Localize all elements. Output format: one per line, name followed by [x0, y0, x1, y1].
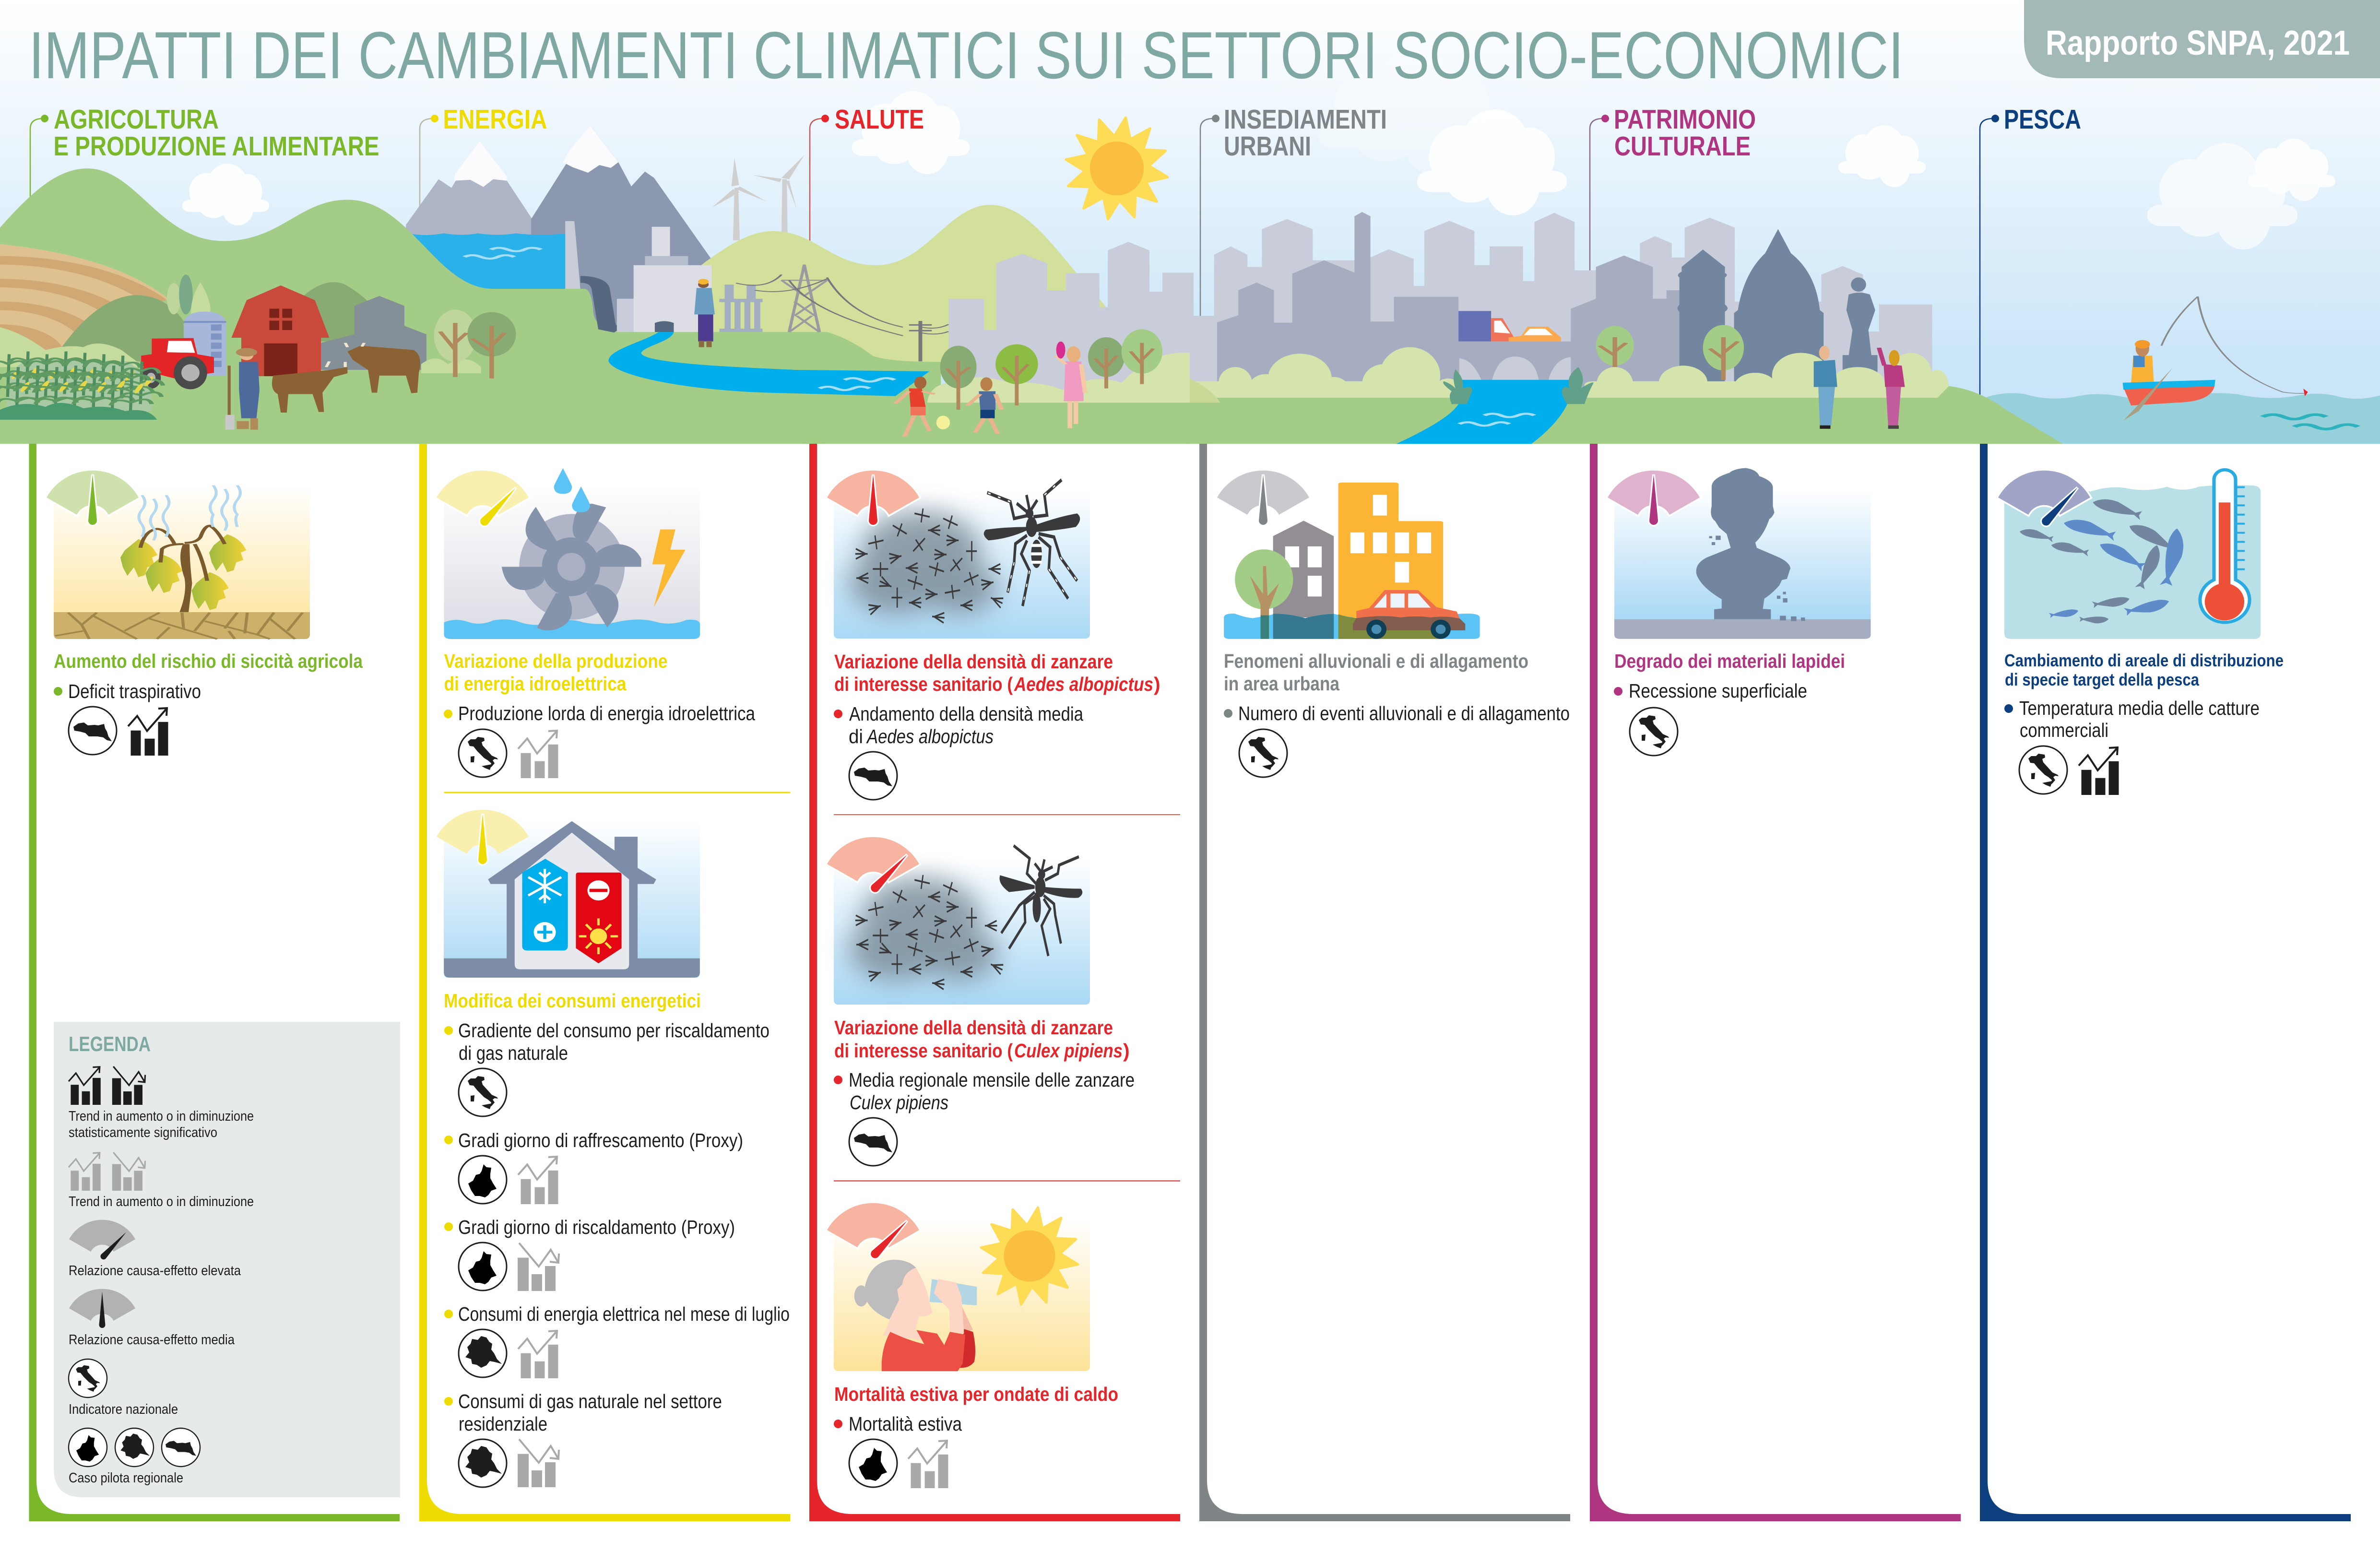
indicator heading — [834, 1017, 1130, 1062]
woman with ball — [1056, 342, 1085, 428]
indicator heading — [834, 651, 1160, 695]
illustration: Culex mosquito swarm — [834, 846, 1090, 1005]
right half of landscape — [1190, 212, 2380, 444]
river in city — [1396, 380, 1573, 444]
indicator heading: Variazione della produzione — [444, 650, 668, 672]
column frame — [1980, 444, 2351, 1521]
indicator heading: Fenomeni alluvionali e di allagamento — [1224, 650, 1528, 672]
cypress trees — [167, 274, 211, 316]
pale green hills — [702, 205, 1115, 370]
city skyline light — [1190, 213, 1932, 398]
wind turbines — [712, 155, 804, 240]
indicator: densita Aedes: di — [849, 725, 863, 747]
indicator: recessione superficiale — [1614, 680, 1807, 756]
legend: medium relation gauge: Relazione causa-effetto media — [69, 1332, 235, 1348]
worker — [694, 279, 715, 347]
gauge: medium relation — [827, 471, 919, 525]
column frame — [419, 444, 790, 1521]
column frame — [1199, 444, 1570, 1521]
indicator: temperatura catture: Temperatura media delle catture — [2019, 697, 2260, 719]
indicator: consumi gas — [444, 1390, 722, 1487]
legend: medium relation gauge — [69, 1289, 235, 1348]
indicator: consumi elettrici: Consumi di energia elettrica nel mese di luglio — [458, 1303, 790, 1325]
indicator heading: di specie target della pesca — [2005, 670, 2200, 689]
man and woman — [1814, 346, 1905, 429]
trees near monuments — [1596, 325, 1744, 380]
heading: agricoltura — [54, 104, 379, 162]
indicator: gradiente consumo: di gas naturale — [459, 1042, 568, 1064]
indicator: gradi giorno riscaldamento: Gradi giorno di riscaldamento (Proxy) — [458, 1216, 735, 1238]
illustration: eroding stone bust — [1614, 468, 1871, 639]
indicator: gradi giorno raffrescamento — [444, 1129, 743, 1204]
legend title: LEGENDA — [69, 1032, 151, 1056]
indicator heading: Modifica dei consumi energetici — [444, 990, 701, 1012]
indicator: mortalita estiva — [834, 1413, 962, 1488]
city skyline light — [948, 242, 1190, 404]
legend: national indicator: Indicatore nazionale — [69, 1402, 178, 1417]
illustration: hydro turbine — [444, 468, 700, 639]
indicator heading: ) — [1123, 1040, 1130, 1062]
bushes — [1190, 347, 1949, 404]
children playing — [895, 377, 1002, 437]
indicator heading: Variazione della densità di zanzare — [834, 651, 1113, 673]
fisherman in boat — [2123, 296, 2308, 421]
indicator: recessione superficiale: Recessione superficiale — [1629, 680, 1807, 702]
illustration: elderly woman drinking in the heat — [834, 1208, 1090, 1371]
indicator: produzione lorda: Produzione lorda di energia idroelettrica — [458, 702, 755, 724]
indicator: gradiente consumo — [444, 1019, 770, 1116]
lake — [410, 233, 569, 290]
indicator: media Culex: Culex pipiens — [850, 1091, 948, 1113]
transformer and pylon — [719, 265, 948, 361]
gauge: medium relation — [47, 471, 139, 525]
cows — [272, 343, 420, 413]
indicator heading: in area urbana — [1224, 673, 1340, 695]
panel: agricoltura — [29, 444, 400, 1521]
heading: pesca: PESCA — [2004, 104, 2081, 135]
indicator: produzione lorda — [444, 702, 755, 778]
truck and car — [1458, 311, 1561, 342]
heading: patrimonio culturale — [1614, 104, 1756, 162]
indicator: densita Aedes — [834, 703, 1083, 800]
illustration: house heating and cooling — [444, 820, 700, 978]
trees near park — [940, 329, 1162, 410]
farmer — [225, 348, 260, 430]
indicator: mortalita estiva: Mortalità estiva — [849, 1413, 962, 1435]
silo — [184, 311, 226, 376]
gauge: medium relation — [1608, 471, 1700, 525]
legend: trend — [69, 1152, 254, 1209]
illustration: fish and thermometer — [2004, 470, 2261, 639]
mountains with snow — [406, 126, 713, 333]
indicator: densita Aedes: Aedes albopictus — [865, 725, 994, 747]
indicator: consumi elettrici — [444, 1303, 790, 1378]
shrub at left edge — [1190, 379, 1220, 403]
power station — [617, 227, 712, 332]
indicator: gradi giorno raffrescamento: Gradi giorno di raffrescamento (Proxy) — [458, 1129, 743, 1151]
city skyline mid tone — [1217, 212, 1683, 392]
panel: pesca — [1980, 444, 2351, 1521]
indicator: gradi giorno riscaldamento — [444, 1216, 735, 1291]
indicator: media Culex — [834, 1069, 1135, 1166]
indicator: temperatura catture: commerciali — [2020, 719, 2108, 741]
indicator: consumi gas: residenziale — [459, 1413, 547, 1435]
bridge arches — [1459, 356, 1571, 381]
field stripes — [0, 244, 167, 350]
indicator heading: di interesse sanitario ( — [834, 673, 1013, 695]
indicator heading — [2004, 651, 2284, 689]
indicator: deficit traspirativo — [54, 680, 201, 756]
legend: significant trend: statisticamente significativo — [69, 1125, 217, 1140]
left half of landscape — [0, 126, 1190, 451]
gauge: medium relation — [437, 810, 529, 864]
heading: insediamenti urbani: URBANI — [1224, 131, 1311, 162]
indicator heading: di interesse sanitario ( — [834, 1040, 1013, 1062]
meadow — [1190, 386, 2063, 444]
heading: salute: SALUTE — [835, 104, 924, 135]
leader lines from sector headings — [30, 115, 1999, 413]
heading: patrimonio culturale: CULTURALE — [1614, 131, 1751, 162]
heading: insediamenti urbani: INSEDIAMENTI — [1224, 104, 1387, 135]
cathedral and statue — [1678, 229, 1878, 392]
indicator: gradiente consumo: Gradiente del consumo per riscaldamento — [458, 1019, 770, 1042]
illustration: Aedes mosquito swarm — [834, 480, 1090, 639]
column frame — [809, 444, 1180, 1521]
tractor — [141, 338, 214, 389]
shrubs behind park — [927, 353, 1190, 403]
legend: high relation gauge — [69, 1220, 241, 1279]
column frame — [1590, 444, 1961, 1521]
legend: significant trend — [69, 1066, 254, 1140]
trees near farm — [421, 309, 516, 379]
indicator heading: Variazione della densità di zanzare — [834, 1017, 1113, 1039]
indicator heading: Cambiamento di areale di distribuzione — [2004, 651, 2284, 670]
panel: patrimonio culturale — [1590, 444, 1961, 1521]
sun in the sky — [1066, 118, 1168, 219]
indicator: consumi gas: Consumi di gas naturale nel settore — [458, 1390, 722, 1412]
gauge: high relation — [827, 837, 919, 894]
grey barn building — [321, 296, 426, 370]
indicator heading: Aumento del rischio di siccità agricola — [54, 650, 363, 672]
legend: significant trend: Trend in aumento o in diminuzione — [69, 1109, 254, 1124]
sea — [1987, 393, 2380, 444]
scene: landscape banner — [0, 57, 2380, 444]
indicator: temperatura catture — [2004, 697, 2260, 795]
corn field — [0, 327, 163, 420]
report badge — [2024, 0, 2380, 78]
heading: agricoltura: E PRODUZIONE ALIMENTARE — [54, 131, 379, 162]
heading: energia: ENERGIA — [443, 104, 547, 135]
gauge: high relation — [437, 471, 529, 527]
panel: salute — [809, 444, 1180, 1521]
indicator: eventi alluvionali: Numero di eventi alluvionali e di allagamento — [1238, 702, 1570, 724]
indicator heading: Aedes albopictus — [1014, 673, 1153, 695]
illustration: flooded buildings and car — [1224, 483, 1480, 639]
indicator heading: ) — [1154, 673, 1160, 695]
river — [608, 332, 929, 396]
red barn — [231, 285, 329, 376]
heading: agricoltura: AGRICOLTURA — [54, 104, 219, 135]
indicator: densita Aedes: Andamento della densità media — [849, 703, 1083, 725]
legend: trend: Trend in aumento o in diminuzione — [69, 1194, 254, 1209]
title: IMPATTI DEI CAMBIAMENTI CLIMATICI SUI SETTORI SOCIO-ECONOMICI — [29, 18, 1904, 93]
gauge: high relation — [1998, 471, 2090, 527]
rear hills — [61, 282, 372, 361]
legend: high relation gauge: Relazione causa-effetto elevata — [69, 1263, 241, 1279]
illustration: withered vine on cracked soil — [54, 485, 310, 639]
panel: insediamenti urbani — [1199, 444, 1570, 1521]
indicator heading — [444, 650, 668, 695]
indicator: media Culex: Media regionale mensile delle zanzare — [849, 1069, 1135, 1091]
reeds — [1443, 367, 1594, 404]
column frame — [29, 444, 400, 1521]
panel: energia — [419, 444, 791, 1521]
clouds — [182, 51, 2335, 249]
indicator heading — [1224, 650, 1528, 695]
heading: patrimonio culturale: PATRIMONIO — [1614, 104, 1756, 135]
indicator heading: Culex pipiens — [1014, 1040, 1123, 1062]
indicator heading: Degrado dei materiali lapidei — [1614, 650, 1845, 672]
legend: regional pilot case — [69, 1428, 200, 1486]
heading: insediamenti urbani — [1224, 104, 1387, 162]
indicator heading: Mortalità estiva per ondate di caldo — [834, 1383, 1118, 1405]
legend — [54, 1022, 400, 1497]
indicator heading: di energia idroelettrica — [444, 673, 627, 695]
legend: regional pilot case: Caso pilota regionale — [69, 1470, 183, 1486]
gauge: medium relation — [1217, 471, 1309, 525]
dam — [565, 221, 580, 290]
pipe — [580, 279, 618, 330]
indicator: deficit traspirativo: Deficit traspirativo — [68, 680, 201, 702]
gauge: high relation — [827, 1203, 919, 1260]
indicator: eventi alluvionali — [1224, 702, 1570, 777]
legend: national indicator — [69, 1359, 178, 1417]
main green hills — [0, 168, 1190, 444]
